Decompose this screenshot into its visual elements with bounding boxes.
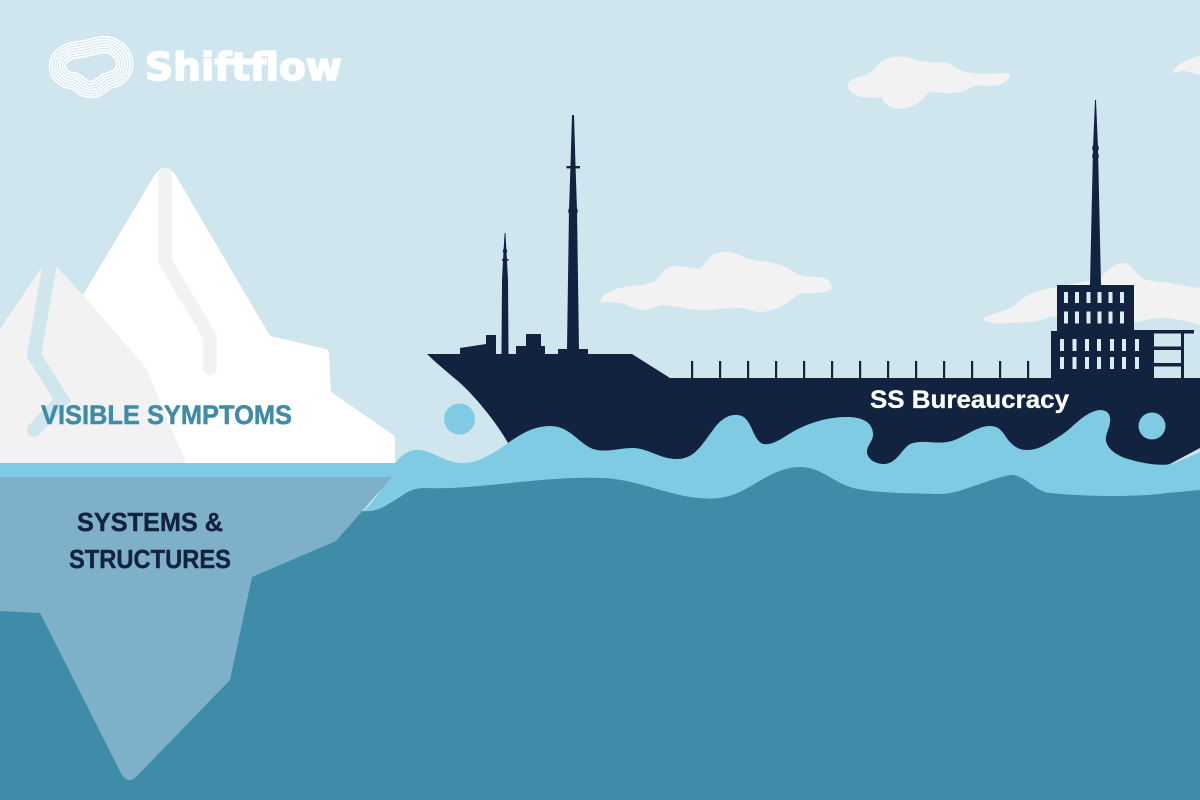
iceberg grey left peak <box>0 267 186 463</box>
icon: concentric contour logo mark <box>67 54 115 80</box>
ship: SS Bureaucracy <box>427 100 1200 480</box>
logo wordmark: Shiftflow <box>145 45 342 89</box>
waterline band <box>0 463 400 477</box>
superstructure windows <box>1060 292 1139 369</box>
crevasse on white peak <box>165 175 210 369</box>
cloud: behind superstructure <box>982 263 1200 325</box>
mast: small fore <box>502 233 508 354</box>
label: visible symptoms: VISIBLE SYMPTOMS <box>41 400 292 430</box>
mast: aft <box>1090 100 1101 285</box>
crevasse on grey peak <box>34 263 62 430</box>
logo: Shiftflow <box>67 45 342 89</box>
light surface wave <box>362 410 1200 530</box>
cloud: behind masts <box>600 252 832 312</box>
ship porthole <box>1138 412 1166 440</box>
deck railing <box>691 361 1029 379</box>
label: systems and structures <box>69 507 231 574</box>
cloud: top centre <box>848 56 1010 109</box>
iceberg above water <box>0 168 395 463</box>
ship hull and deck <box>427 334 1200 480</box>
superstructure <box>1051 285 1194 379</box>
ship name label: SS Bureaucracy <box>870 386 1069 414</box>
cloud: top right corner <box>1172 56 1200 75</box>
label: systems and structures: SYSTEMS & <box>77 507 223 537</box>
deep water <box>0 467 1200 800</box>
iceberg below water <box>0 477 392 780</box>
mast: main fore <box>566 115 580 349</box>
water droplet by bow <box>444 404 475 434</box>
iceberg white peak <box>83 168 395 463</box>
label: systems and structures: STRUCTURES <box>69 544 231 574</box>
